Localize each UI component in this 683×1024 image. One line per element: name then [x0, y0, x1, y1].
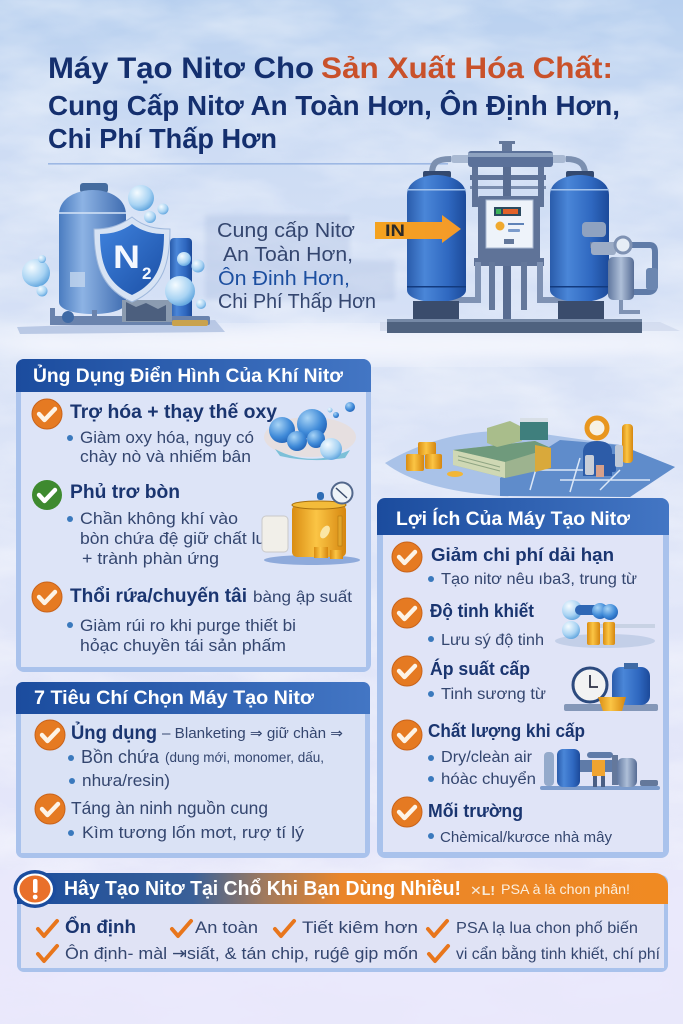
faint factory skyline: [205, 215, 395, 300]
checklist row 2: [38, 944, 661, 963]
item: air quality: Dry/cleàn air: [441, 749, 532, 766]
banknotes: [453, 418, 551, 478]
item: long-term cost: Giảm chi phí dải hạn: [431, 544, 614, 565]
icon: golden tank with gauge: [262, 482, 360, 565]
item: inert reaction: chày nò và nhiếm bân: [80, 448, 251, 466]
icon: compressor equipment: [540, 749, 660, 790]
shield with N2: [94, 217, 170, 302]
heading: [16, 682, 370, 714]
item: supply security: [35, 794, 305, 842]
item: application: [35, 720, 343, 790]
checklist row 1: [38, 916, 638, 937]
heading: [16, 359, 371, 392]
right vessel: [550, 171, 609, 319]
arrow: IN: IN: [385, 221, 405, 240]
checklist row 1: Ổn định: [65, 916, 136, 937]
top manifold: [432, 141, 585, 207]
icon: purity pipes: [555, 600, 655, 648]
banner heading: [17, 873, 668, 904]
item: inert reaction: Trợ hóa + thạy thế oxy: [70, 402, 277, 423]
hero illustration: nitrogen tank with shield: [17, 183, 225, 334]
arrow: IN: [375, 215, 461, 243]
hero text: [217, 220, 376, 313]
item: supply security: Táng àn ninh nguồn cung: [71, 798, 268, 818]
heading: 7 Tiêu Chí Chọn Máy Tạo Nitơ: [34, 687, 314, 709]
engineer and cylinders: [583, 418, 633, 477]
item: long-term cost: Tạo nitơ nêu ıba3, trung từ: [441, 571, 637, 588]
item: inert reaction: [32, 399, 277, 466]
icon: exclamation: [14, 870, 56, 908]
item: air quality: Chất lượng khi cấp: [428, 721, 585, 741]
checklist row 2: vi cẩn bằng tinh khiết, chí phí: [456, 944, 661, 963]
item: tank blanketing: + trành phàn ứng: [82, 550, 219, 568]
item: pressure purge: Thổi rứa/chuyến tâi: [70, 586, 247, 607]
checklist row 1: An toàn: [195, 918, 258, 937]
item: application: – Blanketing ⇒ giữ chàn ⇒: [162, 726, 343, 742]
item: tank blanketing: bòn chứa đệ giữ chất lưu: [80, 530, 277, 548]
item: pressure purge: hỏạc chuyền tái sản phấm: [80, 637, 286, 655]
coins: [406, 442, 463, 477]
item: supply pressure: Tinh sương từ: [441, 686, 546, 703]
checklist row 2: Ôn định- màl ⇥siất, & tán chip, ruǵê gip mốn: [65, 944, 418, 963]
icon: bubbles: [264, 402, 356, 460]
item: tank blanketing: Chần không khí vào: [80, 510, 238, 528]
item: air quality: [392, 720, 585, 788]
control panel: [478, 196, 540, 262]
item: pressure purge: bàng ập suất: [253, 589, 353, 606]
panel: benefits: [377, 498, 669, 858]
banner heading: ✕L!: [470, 883, 495, 898]
item: environment: [392, 797, 612, 846]
side filter and gauge: [582, 222, 658, 312]
heading: Lợi Ích Của Máy Tạo Nitơ: [396, 507, 630, 530]
item: supply security: Kìm tương lốn mơt, rượ tí lý: [82, 823, 305, 842]
heading: [377, 498, 669, 535]
panel: typical nitrogen applications: [16, 359, 371, 672]
title: Cung Cấp Nitơ An Toàn Hơn, Ôn Định Hơn,: [48, 89, 620, 121]
shield with N2: N: [113, 239, 140, 275]
item: tank blanketing: Phủ trơ bòn: [70, 482, 180, 503]
item: long-term cost: [392, 542, 637, 588]
hero text: Cung cấp Nitơ: [217, 220, 355, 242]
shield with N2: 2: [142, 264, 151, 283]
hero text: Chi Phí Thấp Hơn: [218, 291, 376, 313]
item: supply pressure: Áp suất cấp: [430, 658, 530, 679]
item: supply pressure: [392, 656, 546, 703]
item: application: nhưa/resin): [82, 772, 170, 790]
item: pressure purge: Giàm rúi ro khi purge thiết bi: [80, 617, 296, 635]
left vessel: [407, 171, 466, 319]
title: Sản Xuất Hóa Chất:: [321, 52, 613, 85]
heading: Ủng Dụng Điển Hình Của Khí Nitơ: [33, 363, 343, 387]
item: environment: Chèmical/kưσce nhà mây: [440, 829, 612, 846]
title: Chi Phí Thấp Hơn: [48, 123, 277, 154]
item: purity: [392, 598, 544, 649]
item: purity: Lưu sý độ tinh: [441, 632, 544, 649]
panel: call to action banner: [14, 870, 668, 972]
hero illustration: PSA nitrogen generator: [380, 141, 680, 333]
hero text: Ôn Đinh Hơn,: [218, 267, 350, 290]
panel: 7 selection criteria: [16, 682, 370, 858]
title: [48, 52, 620, 165]
item: inert reaction: Giàm oxy hóa, nguy có: [80, 429, 254, 447]
item: purity: Độ tinh khiết: [430, 601, 534, 621]
banner heading: Hây Tạo Nitơ Tại Chổ Khi Bạn Dùng Nhiều!: [64, 878, 461, 900]
item: application: (dung mới, monomer, dấu,: [165, 749, 324, 765]
item: tank blanketing: [32, 480, 277, 568]
item: application: Bồn chứa: [81, 747, 160, 767]
title: Máy Tạo Nitơ Cho: [48, 52, 314, 85]
checklist row 1: Tiết kiêm hơn: [302, 918, 418, 937]
icon: gauge and tank: [564, 663, 658, 711]
banner heading: PSA à là chon phân!: [501, 882, 630, 897]
item: pressure purge: [32, 582, 353, 655]
illustration: money on blueprint: [385, 418, 675, 497]
hero text: An Toàn Hơn,: [223, 244, 353, 266]
checklist row 1: PSA lạ lua chon phố biến: [456, 920, 638, 937]
item: environment: Mối trường: [428, 801, 523, 821]
item: air quality: hóàc chuyển: [441, 771, 536, 788]
item: application: Ủng dụng: [71, 722, 157, 744]
